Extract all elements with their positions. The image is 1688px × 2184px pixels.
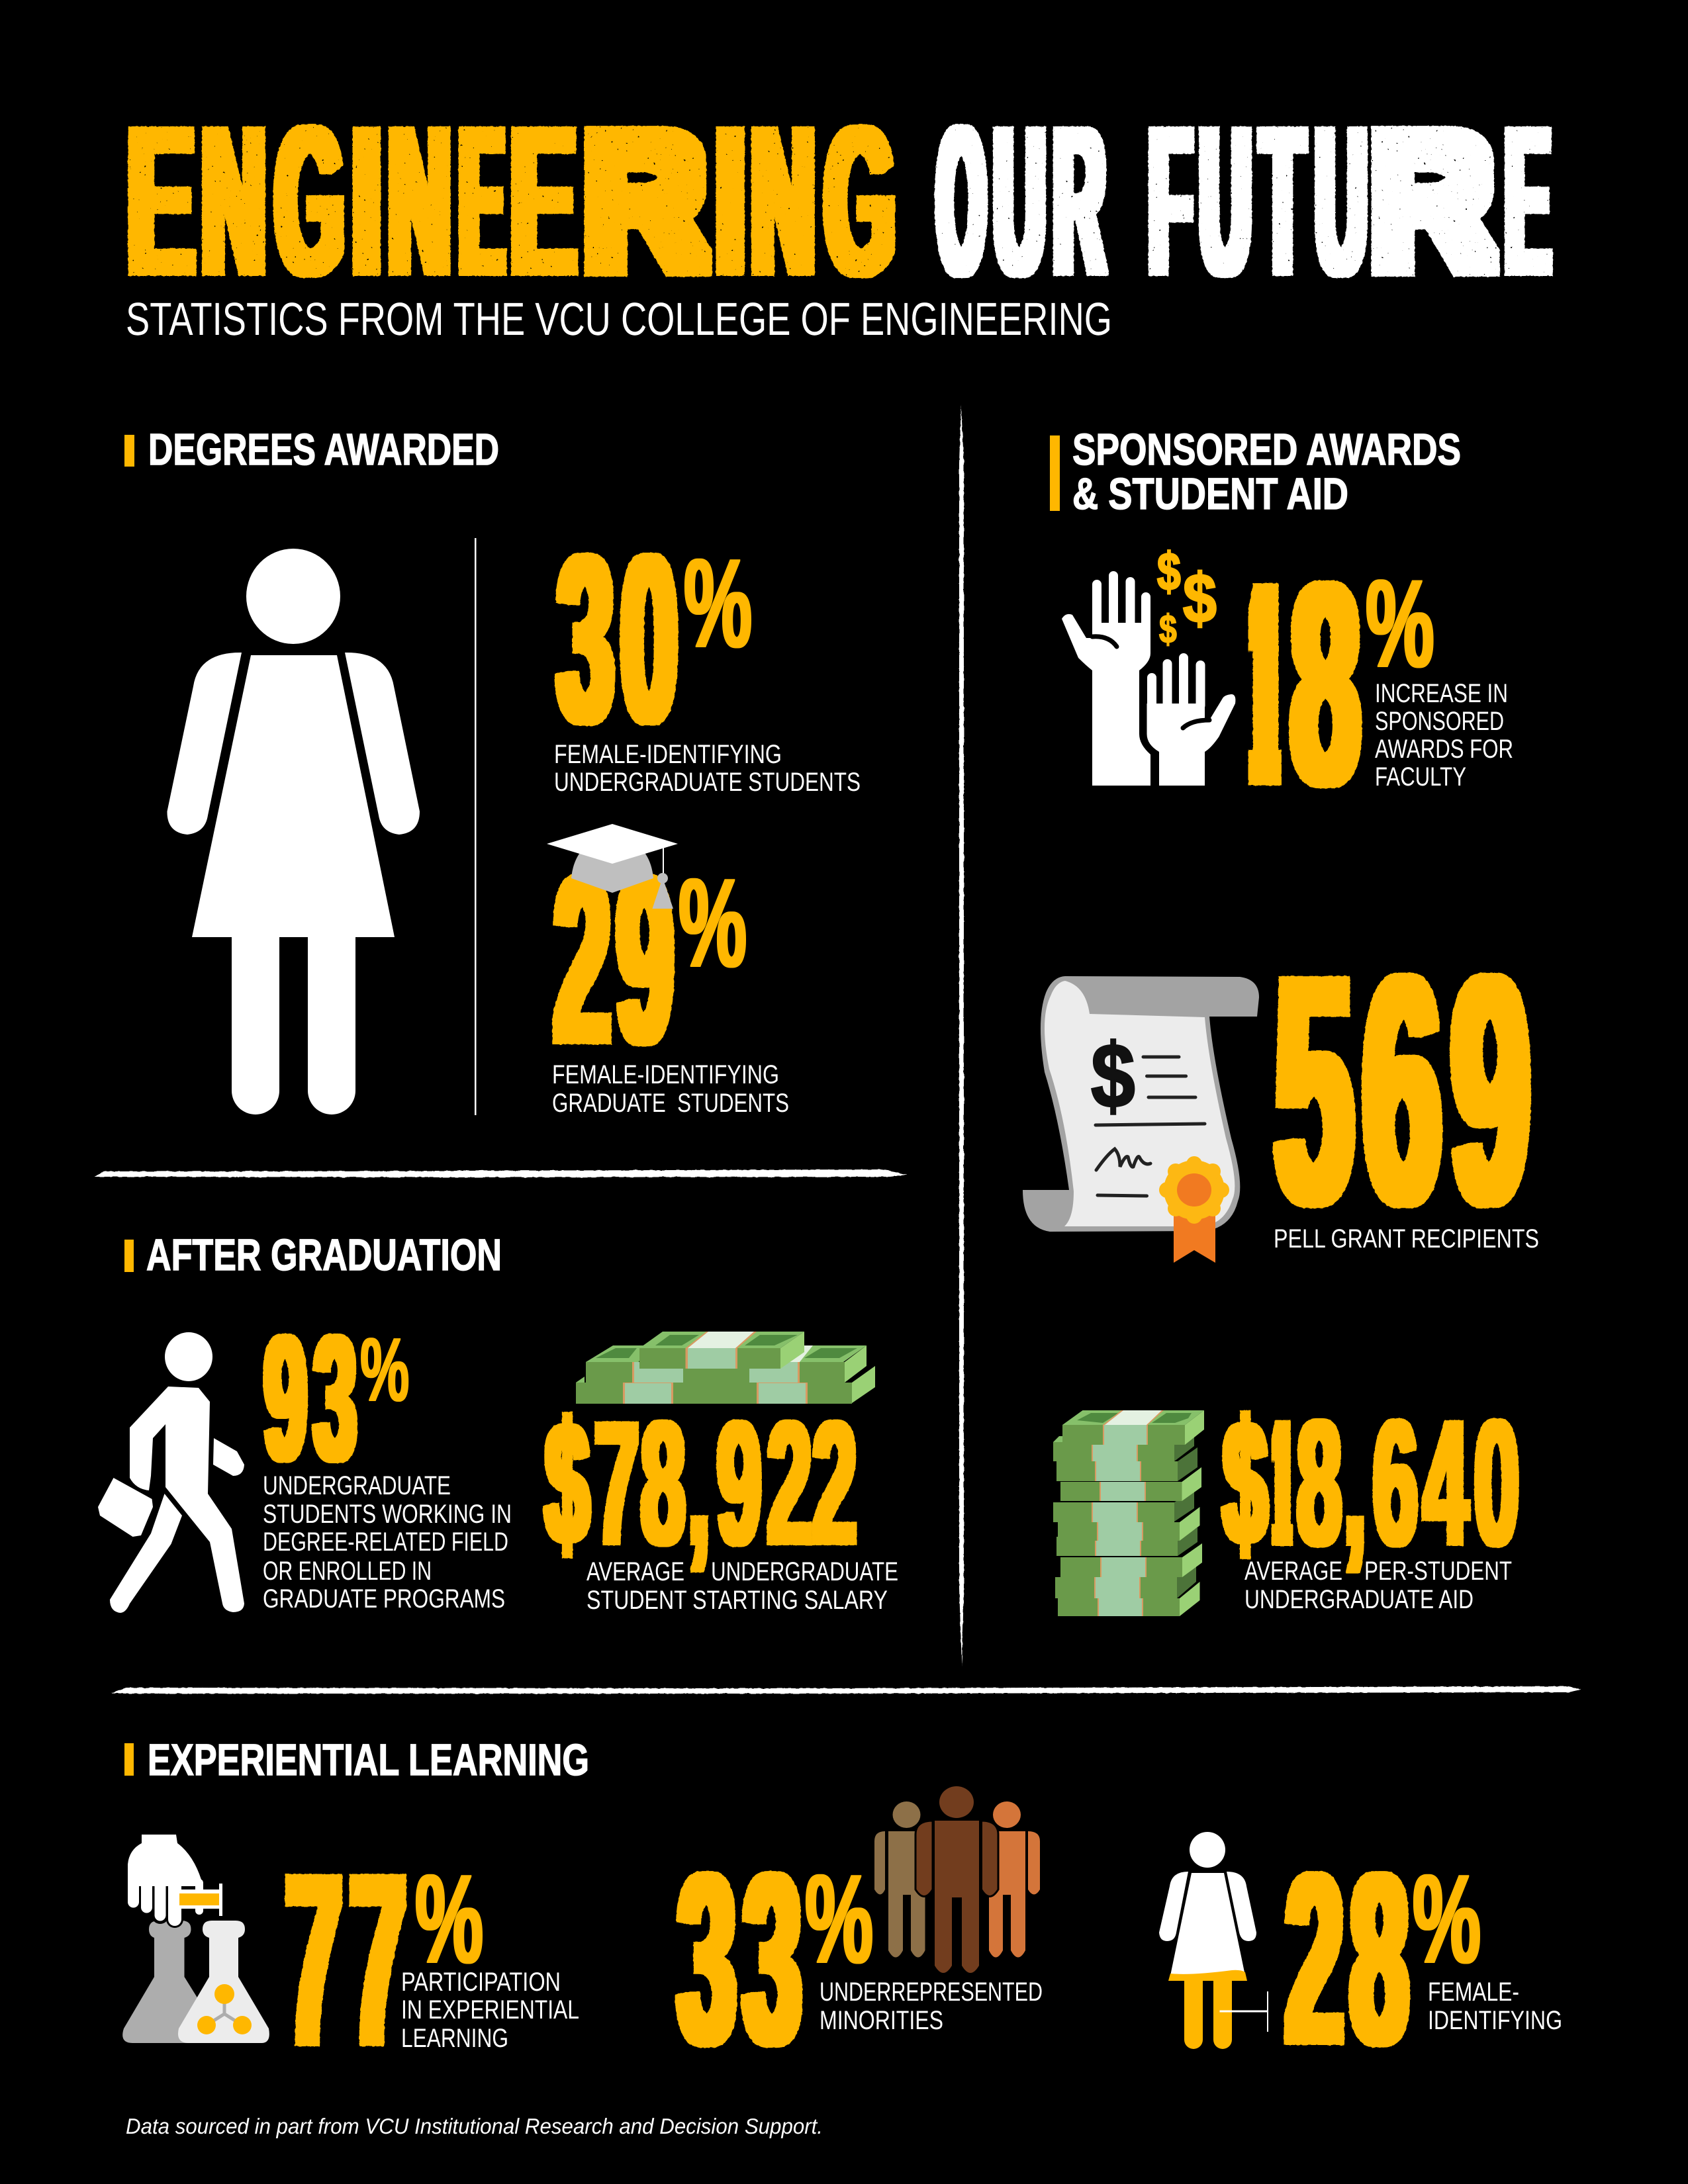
stat: 77 percent: LEARNING	[401, 2024, 508, 2053]
icon: large woman figure	[167, 549, 420, 1115]
stat: 78,922 starting salary: $78,922	[545, 1385, 857, 1580]
title: OUR FUTURE: O	[937, 82, 985, 319]
icon: hands with dollar signs	[1062, 542, 1235, 786]
icon: graduation cap	[547, 824, 678, 909]
title: OUR FUTURE: U	[1316, 82, 1367, 319]
divider: experiential learning top	[111, 1686, 1581, 1694]
icon: tall stack of cash	[1053, 1410, 1204, 1616]
stat: 569 pell grant recipients: PELL GRANT RECIPIENTS	[1274, 1224, 1539, 1253]
stat: 28 percent	[1286, 1825, 1562, 2094]
heading: experiential learning: EXPERIENTIAL LEARNING	[148, 1735, 589, 1785]
stat: 33 percent: UNDERREPRESENTED	[820, 1978, 1043, 2007]
stat: 18,640 per-student aid	[1223, 1383, 1519, 1614]
title: ENGINEERING: R	[582, 100, 706, 302]
icon: scroll certificate with seal	[1023, 976, 1259, 1263]
stat: 28 percent: %	[1413, 1849, 1481, 1989]
stat: 33 percent: MINORITIES	[820, 2006, 943, 2035]
stat: 33 percent: 33	[678, 1825, 801, 2094]
stat: 30 percent: %	[684, 533, 752, 674]
stat: 29 percent: %	[679, 853, 747, 993]
stat: 29 percent	[552, 827, 789, 1118]
icon: scroll certificate with seal: $	[1091, 1025, 1135, 1127]
title: OUR FUTURE: E	[1505, 82, 1550, 319]
stat: 18 percent: FACULTY	[1375, 762, 1466, 792]
title: ENGINEERING: I	[714, 82, 747, 319]
footnote: Data sourced in part from VCU Institutional Research and Decision Support.	[126, 2114, 823, 2138]
stat: 18 percent: %	[1366, 554, 1434, 693]
title: OUR FUTURE	[937, 82, 1550, 319]
title: ENGINEERING: I	[351, 82, 383, 319]
title: OUR FUTURE: U	[994, 82, 1045, 319]
stat: 77 percent: 77	[286, 1824, 406, 2095]
stat: 33 percent	[678, 1825, 1043, 2094]
divider: vertical centre	[959, 405, 964, 1666]
stat: 93 percent: %	[360, 1320, 409, 1420]
icon: hands with dollar signs: $	[1183, 560, 1217, 637]
stat: 569 pell grant recipients: 569	[1275, 910, 1530, 1269]
stat: 93 percent: GRADUATE PROGRAMS	[263, 1584, 505, 1614]
stat: 93 percent: 93	[264, 1298, 356, 1497]
stat: 78,922 starting salary: AVERAGE	[586, 1557, 684, 1586]
stat: 18 percent: 8	[1291, 525, 1360, 843]
stat: 78,922 starting salary: STUDENT STARTING SALARY	[586, 1586, 888, 1615]
heading: sponsored awards and student aid	[1050, 425, 1461, 519]
heading: sponsored awards and student aid: SPONSORED AWARDS	[1072, 425, 1461, 475]
title: ENGINEERING: E	[510, 82, 576, 319]
stat: 28 percent: 28	[1286, 1825, 1408, 2094]
heading: degrees awarded: DEGREES AWARDED	[148, 425, 499, 475]
stat: 78,922 starting salary: UNDERGRADUATE	[711, 1557, 898, 1586]
stat: 30 percent	[554, 506, 861, 797]
stat: 29 percent: GRADUATE STUDENTS	[552, 1089, 789, 1118]
heading: after graduation: AFTER GRADUATION	[146, 1230, 502, 1280]
stat: 77 percent: IN EXPERIENTIAL	[401, 1995, 579, 2025]
stat: 30 percent: 30	[557, 506, 677, 771]
thin rule beside woman figure	[475, 538, 477, 1115]
stat: 18 percent: SPONSORED	[1375, 707, 1504, 736]
heading: sponsored awards and student aid: & STUDENT AID	[1072, 469, 1348, 519]
title: ENGINEERING: N	[202, 82, 265, 319]
stat: 33 percent: %	[805, 1849, 873, 1989]
title: OUR FUTURE: R	[1054, 82, 1105, 319]
stat: 93 percent: DEGREE-RELATED FIELD	[263, 1527, 508, 1557]
stat: 29 percent: FEMALE-IDENTIFYING	[552, 1060, 779, 1089]
title: ENGINEERING: E	[127, 82, 195, 319]
stat: 93 percent: OR ENROLLED IN	[263, 1557, 432, 1586]
stat: 18 percent: 1	[1256, 525, 1274, 843]
title: OUR FUTURE: R	[1369, 100, 1494, 302]
title: ENGINEERING: N	[751, 82, 815, 319]
stat: 29 percent: 29	[554, 827, 673, 1092]
title: ENGINEERING: G	[825, 82, 895, 319]
title: OUR FUTURE: U	[1199, 82, 1251, 319]
title: ENGINEERING: N	[389, 82, 450, 319]
stat: 28 percent: FEMALE-	[1428, 1978, 1519, 2007]
title: ENGINEERING: E	[460, 82, 504, 319]
title: OUR FUTURE: T	[1261, 82, 1304, 319]
stat: 18,640 per-student aid: $	[1223, 1383, 1268, 1582]
stat: 93 percent	[263, 1298, 512, 1614]
icon: group of three people	[874, 1786, 1040, 1973]
icon: hands with dollar signs: $	[1159, 607, 1177, 651]
stat: 18 percent: INCREASE IN	[1375, 679, 1508, 708]
stat: 30 percent: FEMALE-IDENTIFYING	[554, 740, 782, 769]
icon: small woman figure with bracket	[1159, 1832, 1268, 2049]
stat: 18 percent: AWARDS FOR	[1375, 735, 1513, 764]
stat: 77 percent: PARTICIPATION	[401, 1968, 561, 1997]
stat: 18,640 per-student aid: PER-STUDENT	[1364, 1557, 1512, 1586]
stat: 77 percent	[286, 1824, 579, 2095]
stat: 18,640 per-student aid: 1	[1276, 1383, 1288, 1582]
stat: 93 percent: STUDENTS WORKING IN	[263, 1500, 512, 1529]
stat: 30 percent: UNDERGRADUATE STUDENTS	[554, 768, 861, 797]
stat: 18,640 per-student aid: UNDERGRADUATE AID	[1244, 1585, 1474, 1614]
stat: 93 percent: UNDERGRADUATE	[263, 1471, 451, 1500]
title: ENGINEERING	[127, 82, 895, 319]
icon: hands with dollar signs: $	[1157, 542, 1181, 601]
icon: stacks of cash	[576, 1332, 875, 1404]
stat: 77 percent: %	[415, 1849, 483, 1989]
title: ENGINEERING: G	[275, 82, 344, 319]
stat: 18,640 per-student aid: AVERAGE	[1244, 1557, 1342, 1586]
stat: 28 percent: IDENTIFYING	[1428, 2006, 1562, 2035]
stat: 18 percent	[1256, 525, 1513, 843]
subtitle: STATISTICS FROM THE VCU COLLEGE OF ENGINEERING	[126, 293, 1112, 345]
stat: 18,640 per-student aid: 8,640	[1297, 1383, 1519, 1582]
icon: flasks and hand	[122, 1835, 269, 2043]
title: OUR FUTURE: F	[1149, 82, 1192, 319]
icon: walking person with briefcase	[98, 1332, 244, 1613]
divider: after graduation top	[94, 1169, 907, 1177]
